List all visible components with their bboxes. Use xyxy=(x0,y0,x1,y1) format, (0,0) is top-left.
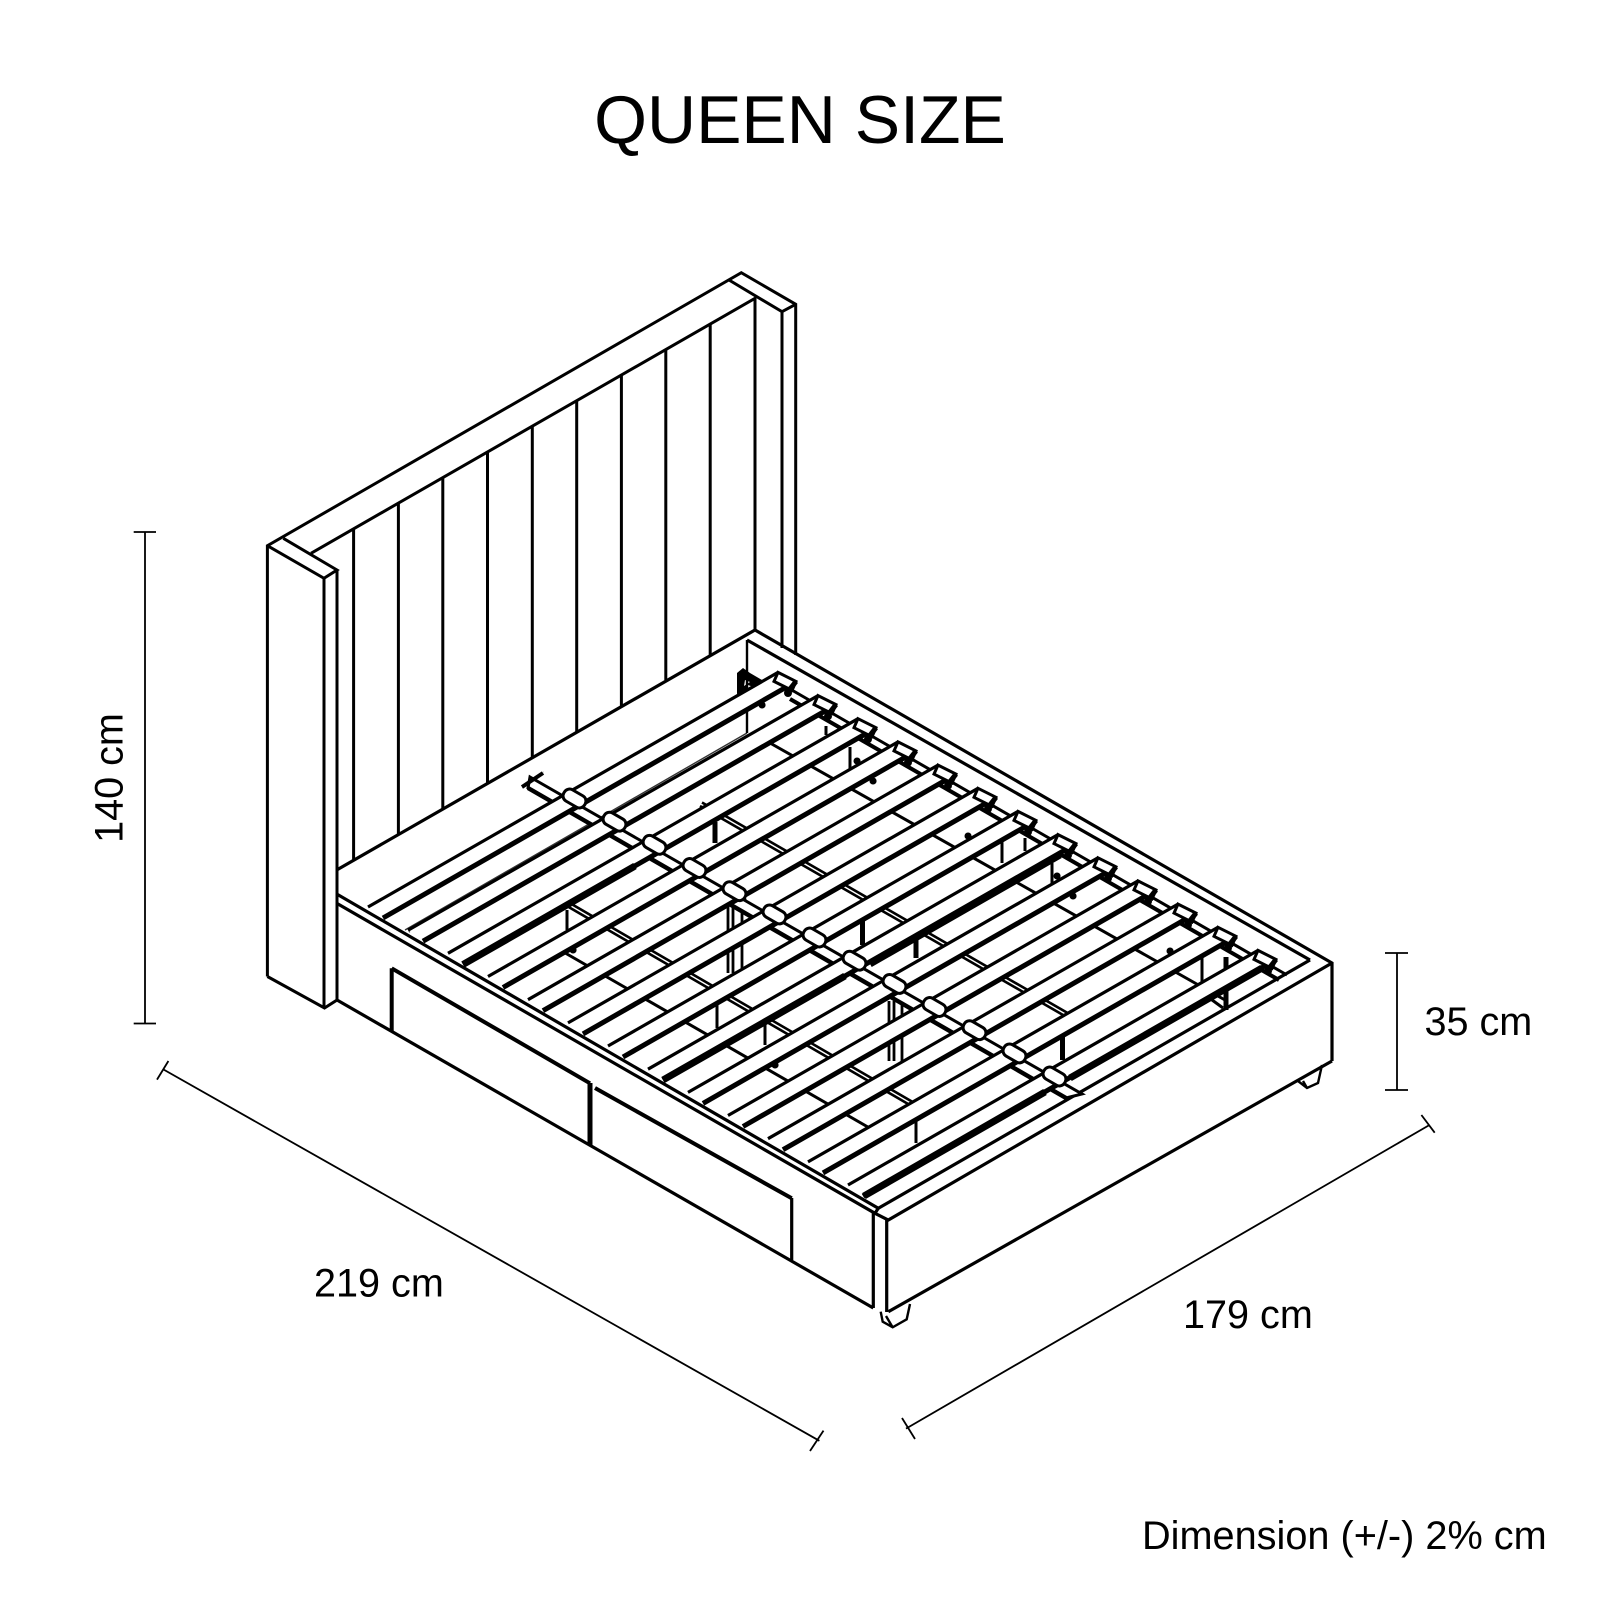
back rail and side rails xyxy=(337,630,1332,1061)
slat 9 xyxy=(688,858,1116,1103)
slat 12 xyxy=(808,927,1236,1173)
slat 4 xyxy=(488,742,916,988)
rear corner post xyxy=(746,640,748,733)
vertical posts xyxy=(567,726,1202,1143)
dimension: width 179 cm xyxy=(902,1115,1435,1439)
dimension: height 140 cm xyxy=(88,532,156,1024)
headboard outline and wings xyxy=(267,273,796,976)
centre bar xyxy=(522,773,1082,1098)
slat 1 xyxy=(368,672,796,918)
under-slat supports xyxy=(405,640,1287,1143)
slat 7 xyxy=(608,811,1036,1057)
slat 8 xyxy=(648,835,1076,1080)
slat 10 xyxy=(728,881,1156,1126)
drawers xyxy=(390,968,394,1032)
slat 6 xyxy=(568,788,996,1034)
slat 2 xyxy=(408,696,836,941)
dimension: height 35 cm: 35 cm xyxy=(1424,1000,1532,1044)
headboard channel lines xyxy=(354,324,710,860)
dimension: length 219 cm: 219 cm xyxy=(314,1262,444,1306)
headboard xyxy=(267,273,796,1008)
dimension: height 35 cm xyxy=(1385,953,1532,1090)
slat 13 xyxy=(848,950,1276,1196)
slat 3 xyxy=(448,719,876,964)
rear leg xyxy=(1298,1065,1322,1088)
heavier slat shadows xyxy=(463,855,1262,1196)
tolerance note: Dimension (+/-) 2% cm xyxy=(1142,1514,1547,1558)
back thin rail xyxy=(405,733,747,932)
title: QUEEN SIZE xyxy=(594,82,1006,158)
screw dots xyxy=(573,705,1170,1065)
bar body xyxy=(528,777,1082,1098)
slat 5 xyxy=(528,765,956,1011)
front leg xyxy=(881,1304,910,1327)
long cross supports xyxy=(700,802,1072,1019)
slat 11 xyxy=(768,904,1196,1150)
dimension: length 219 cm xyxy=(157,1061,824,1451)
dimension: height 140 cm: 140 cm xyxy=(88,713,132,843)
right side rails xyxy=(790,689,1287,975)
bar end cap xyxy=(522,773,543,787)
frame xyxy=(337,630,1332,1327)
bed slats xyxy=(368,672,1276,1196)
bed illustration xyxy=(267,273,1332,1327)
rear bracket xyxy=(737,668,762,694)
dimension: width 179 cm: 179 cm xyxy=(1183,1293,1313,1337)
bar lower edge xyxy=(528,788,1066,1098)
